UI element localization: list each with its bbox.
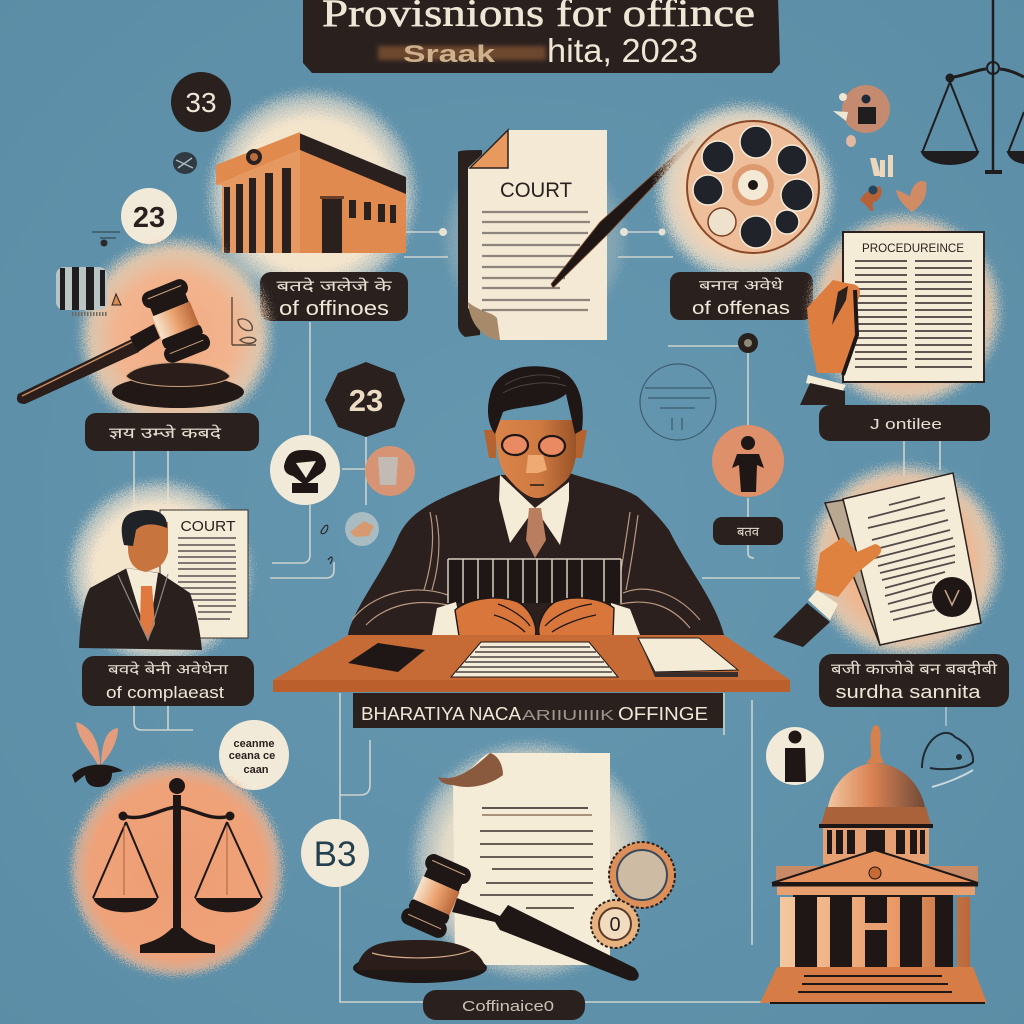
icon: wheel with circles [687, 121, 819, 253]
label: of offenas: of offenas [692, 298, 790, 318]
collar and tie [499, 475, 569, 545]
glow behind court building [204, 87, 420, 303]
banner: Bharatiya: BHARATIYA NACA [361, 704, 521, 724]
glow behind right paper [805, 210, 1005, 410]
label: bottom [423, 990, 585, 1020]
icon: hand with book [773, 473, 981, 647]
label: J ontilee: J ontilee [870, 416, 942, 433]
glow behind lawyer [65, 477, 255, 667]
badge: 23 small: 23 [133, 202, 165, 234]
label: hindi caption left: ज्ञय उम्जे कबदे [109, 424, 222, 442]
glow behind bottom document [408, 738, 652, 982]
hands [432, 602, 463, 636]
document behind lawyer [160, 510, 248, 638]
badge: small text circle: caan [243, 764, 269, 776]
glasses [502, 435, 528, 455]
tiny marks [92, 232, 120, 246]
icon: bottom document [438, 753, 610, 965]
label: small tag: बतव [737, 524, 760, 539]
title banner [303, 0, 780, 73]
glow behind wheel [653, 100, 837, 284]
connector lines [134, 232, 940, 1002]
icon: court document [458, 130, 695, 340]
badge: B3 [301, 819, 369, 887]
label: small tag [713, 517, 783, 545]
icon: court building [216, 132, 406, 253]
badge: 33: 33 [185, 87, 217, 118]
banner: Bharatiya: OFFINGE [618, 704, 708, 724]
label: surdha sannita: बजी काजोबे बन बबदीबी [831, 660, 998, 678]
badge: 23 small [121, 188, 177, 244]
dot node [738, 333, 758, 353]
label: of offenas [670, 272, 813, 320]
label: of complaeast: of complaeast [106, 683, 224, 702]
label: bottom: Coffinaice0 [462, 998, 554, 1015]
badge: small text circle [219, 720, 289, 790]
icon: small leaves [860, 181, 926, 212]
icon: seals: 0 [609, 914, 621, 936]
gown stripes [448, 559, 621, 603]
icon: top right person blob [833, 85, 890, 147]
subtitle text: Sraak [403, 41, 496, 68]
icon: gavel [17, 277, 244, 408]
label: of complaeast [82, 656, 254, 706]
document glow [440, 145, 630, 335]
tiny squiggles [321, 525, 332, 564]
icon: hand with document [800, 232, 984, 405]
icon: striped jar [56, 267, 121, 314]
subtitle text: hita, 2023 [547, 32, 698, 69]
icon: hand with document: PROCEDUREINCE [862, 241, 964, 255]
icon: orange circle [365, 446, 415, 496]
badge: small text circle: ceanme [234, 738, 274, 750]
icon: small outline [922, 707, 973, 787]
subtitle text [378, 32, 698, 69]
judge robe [348, 473, 724, 635]
icon: person circle bottom right [766, 727, 824, 785]
icon: plant [72, 722, 123, 787]
small circle outline [640, 364, 716, 440]
desk [273, 635, 790, 692]
head [484, 430, 587, 458]
icon: seals [591, 842, 675, 948]
icon: bottom gavel [353, 852, 639, 983]
document heading: COURT [500, 179, 572, 202]
label: of complaeast: बवदे बेनी अवेधेना [108, 661, 228, 677]
label: of offinces [260, 272, 408, 321]
label: surdha sannita: surdha sannita [836, 682, 982, 702]
small ornament [173, 152, 197, 174]
glow behind gavel [76, 235, 276, 435]
label: of offinces: of offinoes [279, 298, 389, 320]
label: surdha sannita [819, 654, 1009, 707]
scales panel [69, 762, 285, 978]
label: hindi caption left [85, 413, 259, 451]
icon: person circle [712, 425, 784, 497]
label: J ontilee [819, 405, 990, 441]
badge: small text circle: ceana ce [229, 750, 275, 762]
badge: 33 [171, 72, 231, 132]
icon: parliament building [760, 725, 987, 1003]
tiny script marks [232, 297, 256, 345]
badge: hexagon 23 [325, 362, 405, 437]
label: of offenas: बनाव अवेधे [699, 277, 784, 293]
banner: Bharatiya [353, 693, 723, 728]
banner: Bharatiya: ARIIUIIIIK [522, 707, 614, 724]
document behind lawyer: COURT [180, 518, 236, 535]
badge: B3: B3 [314, 835, 356, 874]
scales icon top right [922, 0, 1024, 172]
connector dots [439, 228, 666, 236]
icon: dark hat [270, 435, 340, 505]
badge: hexagon 23: 23 [349, 383, 383, 418]
central judge [348, 366, 724, 639]
icon: cream fingers [870, 155, 893, 177]
glow behind right document [805, 460, 1005, 660]
icon: lawyer [79, 510, 202, 650]
label: of offinces: बतदे जलेजे के [276, 277, 392, 295]
icon: tiny seal [345, 512, 379, 546]
